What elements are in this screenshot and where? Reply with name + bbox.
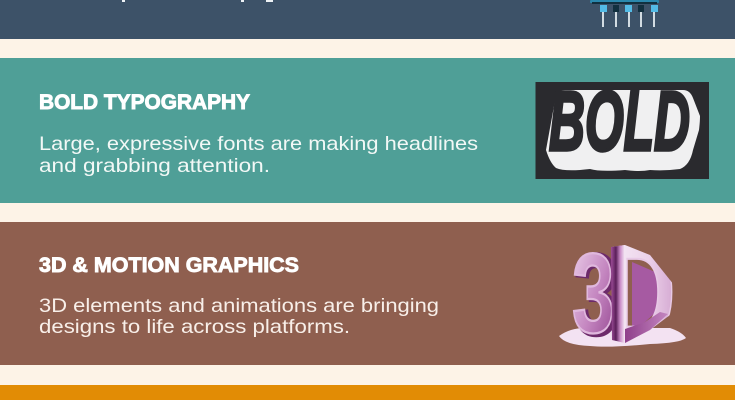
panel: responsive design (top, cropped)	[0, 0, 735, 39]
clipped text descenders	[122, 0, 273, 2]
heading: 3D and motion graphics: 3D & MOTION GRAPHICS	[39, 253, 299, 277]
body text: 3D and motion graphics: 3D elements and animations are bringing	[39, 295, 439, 317]
icon: 3D purple letters: 3	[574, 230, 619, 358]
heading: bold typography: BOLD TYPOGRAPHY	[39, 90, 250, 114]
icon: 3D purple letters	[559, 245, 686, 347]
panel: 3D and motion graphics	[0, 222, 735, 365]
icon: 3D purple letters: D	[607, 211, 676, 375]
panel: bold typography	[0, 58, 735, 203]
icon: circuit chip pins	[590, 0, 659, 27]
panel: next trend (bottom, cropped)	[0, 385, 735, 400]
body text: 3D and motion graphics: designs to life across platforms.	[39, 316, 350, 338]
icon: 3D purple letters: 3	[572, 229, 615, 357]
body text: bold typography: and grabbing attention.	[39, 155, 270, 177]
body text: bold typography: Large, expressive fonts are making headlines	[39, 133, 478, 155]
